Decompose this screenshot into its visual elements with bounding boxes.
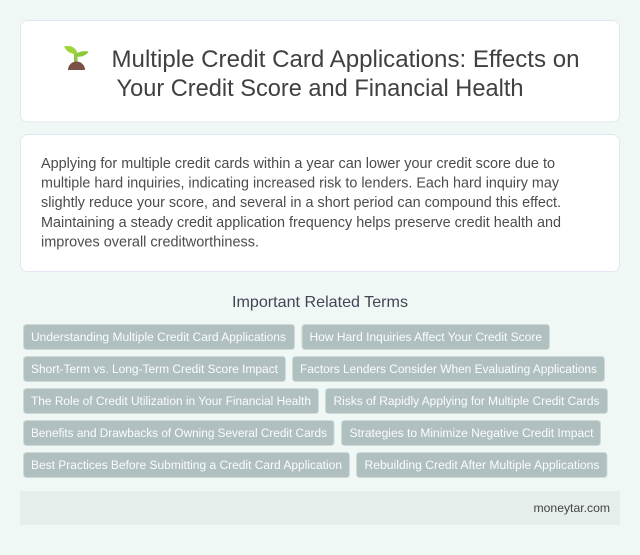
tag: Rebuilding Credit After Multiple Applications [364, 458, 600, 472]
tag list [24, 324, 608, 478]
text block: summary: improves overall creditworthiness. [41, 234, 259, 250]
text block: summary: multiple hard inquiries, indicating increased risk to lenders. Each hard inquiry may [41, 176, 560, 192]
panel: summary paragraph [20, 134, 620, 272]
title [112, 46, 580, 102]
tag: Benefits and Drawbacks of Owning Several Credit Cards [31, 426, 327, 440]
heading: important related terms: Important Related Terms [232, 294, 408, 311]
tag [342, 420, 600, 446]
tag [326, 388, 608, 414]
tag: Risks of Rapidly Applying for Multiple Credit Cards [334, 394, 600, 408]
tag [24, 324, 294, 350]
title: Multiple Credit Card Applications: Effects on [112, 46, 580, 73]
tag: Factors Lenders Consider When Evaluating Applications [300, 362, 597, 376]
text block: summary [41, 156, 561, 250]
tag [292, 356, 604, 382]
tag: Short-Term vs. Long-Term Credit Score Impact [31, 362, 279, 376]
text block: summary: slightly reduce your score, and several in a short period can compound this effect. [41, 195, 561, 211]
tag [24, 452, 350, 478]
tag: Best Practices Before Submitting a Credit Card Application [31, 458, 342, 472]
tag [356, 452, 607, 478]
text block: summary: Maintaining a steady credit application frequency helps preserve credit health and [41, 215, 561, 231]
footer [20, 491, 620, 525]
tag: The Role of Credit Utilization in Your Financial Health [31, 394, 311, 408]
footer source text: moneytar.com [534, 501, 610, 515]
text block: summary: Applying for multiple credit cards within a year can lower your credit score due to [41, 156, 555, 172]
title: Your Credit Score and Financial Health [116, 75, 524, 102]
tag [24, 420, 334, 446]
panel: title card [20, 20, 620, 122]
tag: Strategies to Minimize Negative Credit Impact [350, 426, 594, 440]
tag: How Hard Inquiries Affect Your Credit Score [310, 330, 542, 344]
tag [24, 388, 318, 414]
tag [24, 356, 286, 382]
tag [302, 324, 550, 350]
tag: Understanding Multiple Credit Card Applications [31, 330, 286, 344]
icon: sprout [64, 46, 88, 70]
